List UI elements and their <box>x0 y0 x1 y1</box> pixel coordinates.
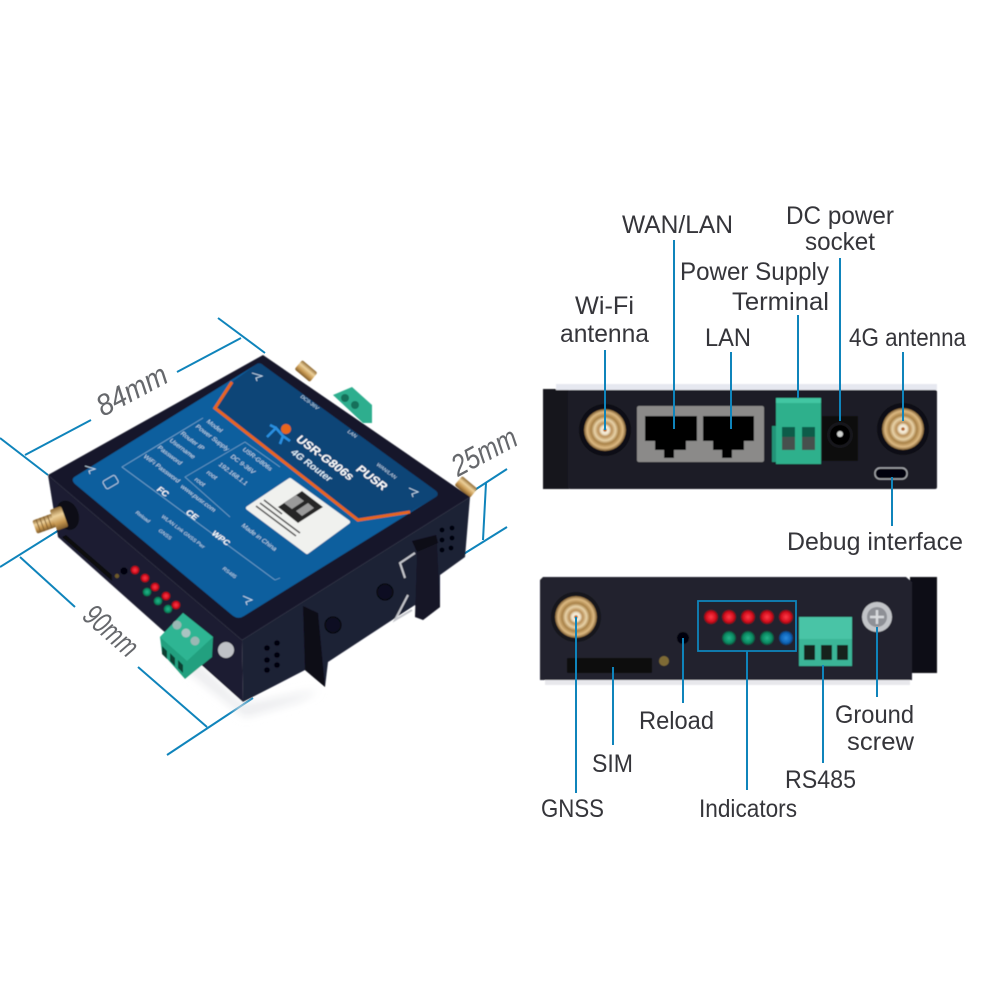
label: LAN: LAN <box>705 324 751 352</box>
certification marks: Made in China <box>240 523 279 553</box>
panel: rear view with ports <box>543 202 966 556</box>
ground screw <box>218 642 234 658</box>
label text left column: Router IP <box>179 431 206 452</box>
product name: USR-G806s <box>293 433 358 483</box>
label: Power Supply Terminal: Terminal <box>732 288 829 316</box>
QR sticker <box>248 480 348 552</box>
logo: running figure <box>267 424 291 444</box>
label text left column: Password <box>156 445 184 467</box>
label text right column: USR-G806s <box>241 447 274 472</box>
bottom green terminal <box>160 613 213 679</box>
label: Ground screw: Ground <box>835 701 914 729</box>
label text right column: www.pusr.com <box>178 483 217 513</box>
label: Power Supply Terminal: Power Supply <box>680 258 829 286</box>
label: table outline <box>122 418 275 580</box>
vents <box>264 526 454 673</box>
top face frame <box>48 355 470 640</box>
reload hole <box>120 567 128 575</box>
label text left column: Power Supply <box>194 424 231 453</box>
port legend text: RS485 <box>221 566 238 580</box>
dimension: 84mm: 84mm <box>91 358 173 423</box>
label: blue <box>73 363 438 618</box>
front leader lines <box>576 617 877 793</box>
top highlight <box>556 384 937 390</box>
panel: front view with indicators <box>540 577 937 823</box>
label: WAN/LAN: WAN/LAN <box>622 211 733 239</box>
certification marks: WPC <box>210 529 233 547</box>
dimension: 90mm: 90mm <box>76 598 145 664</box>
chassis <box>540 577 912 680</box>
label: DC power socket: socket <box>805 228 875 256</box>
product name: PUSR <box>353 463 391 493</box>
certification marks: FC <box>155 485 172 499</box>
label: Wi-Fi antenna: Wi-Fi <box>575 292 634 320</box>
RJ45 panel <box>637 406 764 462</box>
port legend text: Reload <box>134 510 151 524</box>
product name <box>288 433 391 493</box>
bracket <box>543 389 569 489</box>
label: Indicators: Indicators <box>699 795 797 823</box>
label: SIM: SIM <box>592 750 633 778</box>
label: DC power socket: DC power <box>786 202 894 230</box>
ground screw <box>862 602 892 632</box>
label: antenna marks <box>85 373 418 605</box>
panel: isometric router photo with dimensions <box>0 318 523 755</box>
port legend text <box>134 394 398 580</box>
label: DC power socket <box>786 202 894 256</box>
dimension: 25mm: 25mm <box>445 421 523 484</box>
label text right column: 192.168.1.1 <box>217 462 250 487</box>
green power terminal <box>772 398 821 464</box>
label: Reload: Reload <box>639 707 714 735</box>
DIN rail clip <box>303 535 440 687</box>
micro USB port <box>875 468 907 479</box>
product name: 4G Router <box>288 448 335 484</box>
router body <box>29 355 478 716</box>
label: Power Supply Terminal <box>680 258 829 316</box>
right face with DIN rail plate <box>242 497 470 702</box>
right antenna <box>454 476 478 498</box>
LEDs <box>131 566 180 613</box>
small gold LED <box>115 574 119 578</box>
label: Wi-Fi antenna: antenna <box>560 320 649 348</box>
top antenna <box>294 360 318 382</box>
certification marks <box>155 485 279 553</box>
label: RS485: RS485 <box>785 766 856 794</box>
top green terminal <box>333 387 372 423</box>
chassis <box>568 390 937 489</box>
label: 4G antenna: 4G antenna <box>849 324 966 352</box>
certification marks: CE <box>184 508 201 522</box>
label: orange stripe <box>215 382 410 520</box>
DC socket <box>822 416 858 461</box>
RS485 terminal <box>799 617 852 666</box>
left face <box>48 475 243 702</box>
SIM slot <box>62 535 112 581</box>
shadow strip <box>545 680 910 685</box>
label: Wi-Fi antenna <box>560 292 649 348</box>
port legend text: GNSS <box>157 528 173 541</box>
indicator outline <box>698 601 796 651</box>
port legend text: LAN <box>346 429 358 440</box>
bracket <box>910 577 937 673</box>
label text right column <box>178 447 274 513</box>
port legend text: DC9-36V <box>299 394 321 411</box>
label text right column: root <box>205 470 219 481</box>
label: Ground screw: screw <box>847 728 915 756</box>
label text left column: Model <box>205 419 224 434</box>
label text left column: WiFi Password <box>142 454 182 485</box>
Wi-Fi SMA connector <box>579 404 631 456</box>
label: GNSS: GNSS <box>541 795 604 823</box>
indicator LEDs <box>704 610 793 645</box>
label text right column: root <box>193 477 207 488</box>
label text left column: Username <box>168 438 197 461</box>
SIM slot <box>567 658 652 673</box>
contact shadow <box>170 640 320 716</box>
rear leader lines <box>605 240 903 526</box>
label text right column: DC 9-36V <box>229 454 257 476</box>
dimension lines <box>0 318 507 755</box>
small gold LED <box>659 656 669 666</box>
label: SIM icon <box>102 475 119 489</box>
GNSS SMA connector <box>551 592 601 642</box>
reload hole <box>677 632 689 644</box>
label text left column <box>142 419 231 485</box>
port legend text: WAN/LAN <box>375 462 398 481</box>
4G SMA connector <box>877 403 929 455</box>
label: dark upper region <box>215 363 438 520</box>
port legend text: WLAN Link GNSS Pwr <box>160 514 206 550</box>
left antenna <box>29 497 83 541</box>
label: Debug interface: Debug interface <box>787 528 963 556</box>
label: Ground screw <box>835 701 915 756</box>
